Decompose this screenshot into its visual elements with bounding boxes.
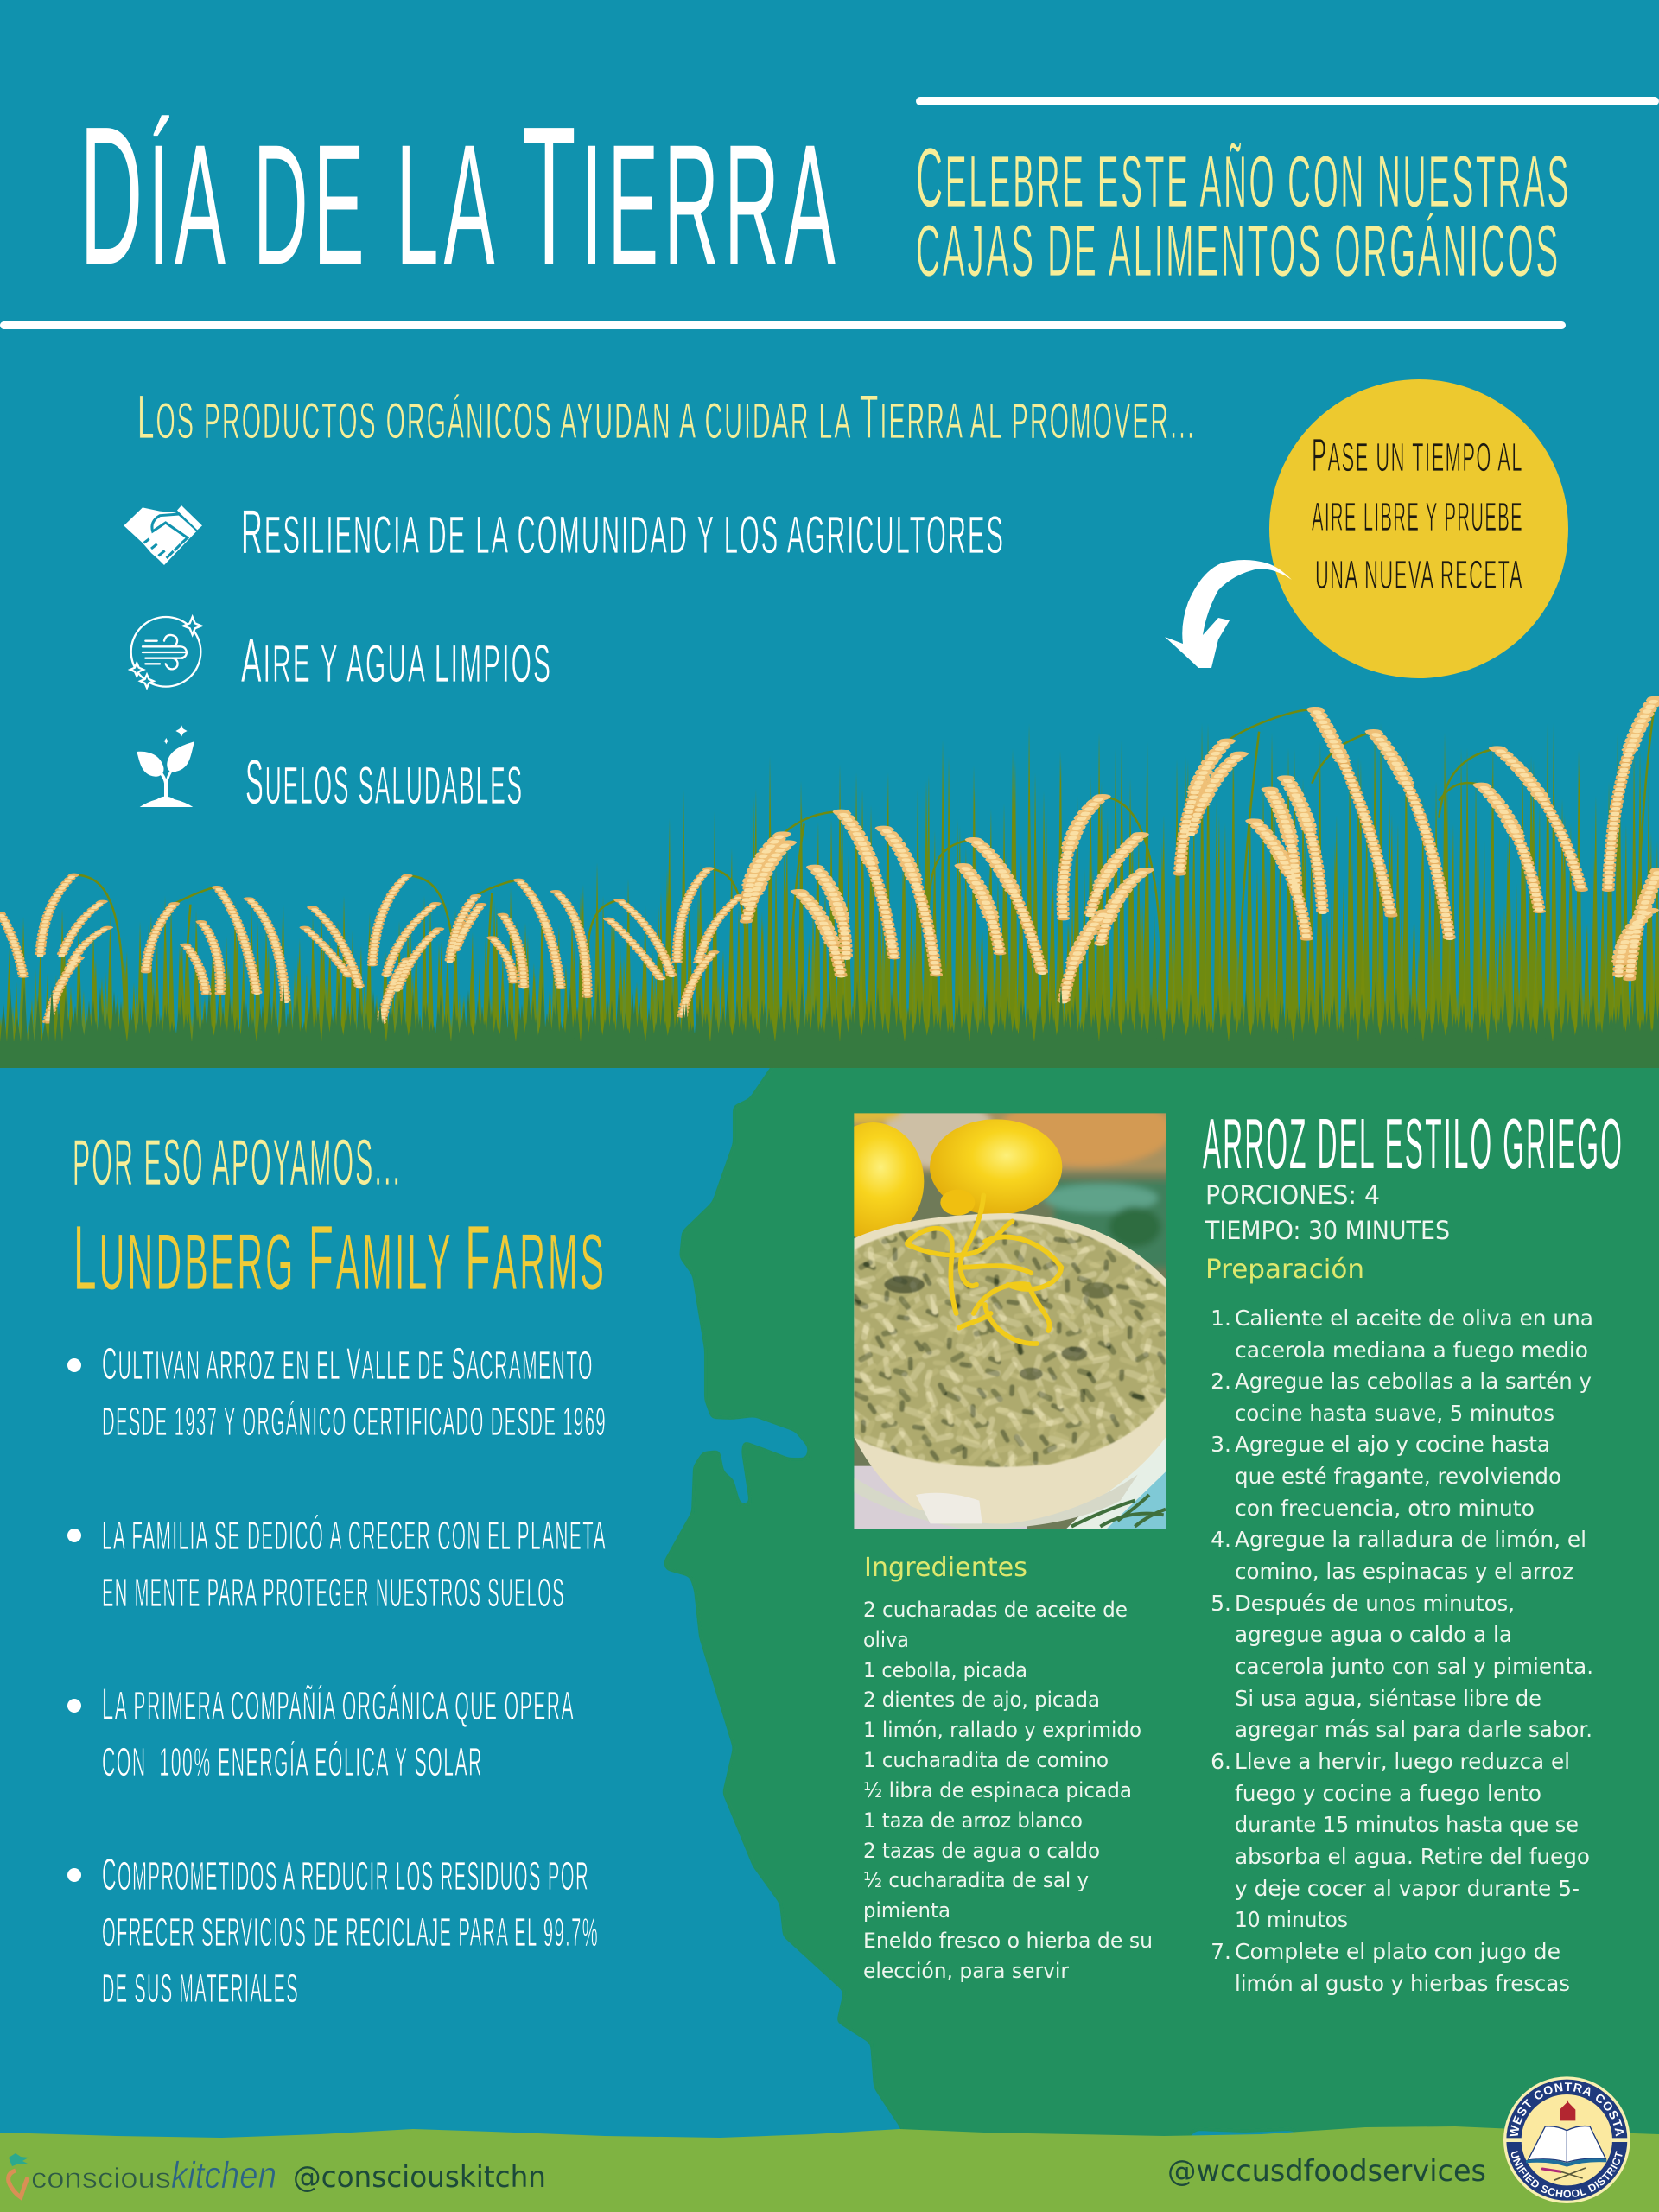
preparation steps: fuego y cocine a fuego lento [1235,1781,1541,1806]
subtitle [916,130,1571,291]
ingredients list: 2 dientes de ajo, picada [863,1688,1100,1712]
preparation steps: cacerola junto con sal y pimienta. [1235,1654,1593,1679]
ingredients heading: Ingredientes [864,1553,1027,1583]
ingredients list: ½ cucharadita de sal y [863,1868,1089,1892]
icon: carrot [9,2153,29,2197]
preparation steps: limón al gusto y hierbas frescas [1235,1971,1570,1996]
ingredients list: 2 cucharadas de aceite de [863,1598,1128,1622]
bullet 1 [67,1339,607,1444]
ingredients list: Eneldo fresco o hierba de su [863,1929,1153,1953]
preparation steps: comino, las espinacas y el arroz [1235,1559,1573,1584]
preparation steps: 3. [1211,1432,1231,1457]
olive front blades [9,895,1659,1068]
logo: conscious kitchen [9,2153,276,2197]
preparation steps [1211,1306,1593,1996]
benefit 2: AIRE Y AGUA LIMPIOS [241,626,552,696]
ingredients list: ½ libra de espinaca picada [863,1778,1132,1802]
preparation steps: 10 minutos [1235,1907,1348,1932]
preparation steps: Lleve a hervir, luego reduzca el [1235,1749,1570,1774]
infographic canvas: COMPROMETIDOS A REDUCIR LOS RESIDUOS POR [102,1850,589,1900]
large panicles: upper thick husk [746,698,1659,1002]
large panicles: husk [746,698,1659,1002]
arrow [1165,560,1292,668]
header rule bottom [0,321,1566,329]
infographic canvas: POR ESO APOYAMOS... [73,1126,402,1198]
preparation steps: Agregue las cebollas a la sartén y [1235,1369,1592,1394]
preparation steps: absorba el agua. Retire del fuego [1235,1844,1590,1869]
ingredients list: 1 limón, rallado y exprimido [863,1718,1141,1742]
large panicles: grain [746,698,1659,1002]
infographic canvas: EN MENTE PARA PROTEGER NUESTROS SUELOS [102,1570,565,1615]
handle: conscious kitchen: @consciouskitchn [293,2160,546,2195]
infographic canvas: LA FAMILIA SE DEDICÓ A CRECER CON EL PLANETA [102,1513,607,1558]
ingredients list: 2 tazas de agua o caldo [863,1839,1100,1863]
ingredients list: pimienta [863,1898,950,1923]
preparation steps: con frecuencia, otro minuto [1235,1496,1535,1521]
seal: west contra costa unified school district [1503,2076,1630,2203]
small panicles: grain [0,868,741,1022]
servings and time [1205,1180,1450,1245]
rice field illustration [0,698,1659,1068]
ingredients list: oliva [863,1628,909,1652]
photo: greek rice bowl [854,1113,1166,1529]
preparation steps: 7. [1211,1939,1231,1964]
ingredients list: elección, para servir [863,1959,1069,1983]
ingredients list: 1 cebolla, picada [863,1658,1027,1682]
preparation steps: 5. [1211,1591,1231,1616]
preparation steps: cocine hasta suave, 5 minutos [1235,1401,1554,1426]
preparation steps: Agregue el ajo y cocine hasta [1235,1432,1550,1457]
infographic canvas: LA PRIMERA COMPAÑÍA ORGÁNICA QUE OPERA [102,1680,575,1730]
bullet 1: CULTIVAN ARROZ EN EL VALLE DE SACRAMENTO [102,1339,594,1389]
handle: wccusd food services: @wccusdfoodservices [1167,2154,1486,2189]
preparation steps: 1. [1211,1306,1231,1331]
ingredients list: 1 cucharadita de comino [863,1748,1109,1772]
logo: conscious kitchen: conscious [31,2162,171,2194]
logo: conscious kitchen: kitchen [171,2154,276,2196]
servings and time: TIEMPO: 30 MINUTES [1205,1216,1450,1245]
panel: green recipe background [664,1063,1659,2143]
preparation steps: y deje cocer al vapor durante 5- [1235,1876,1580,1901]
bullet 2 [67,1513,607,1615]
seal: west contra costa unified school district: WEST CONTRA COSTA [1509,2082,1624,2136]
preparation steps: 6. [1211,1749,1231,1774]
ingredients list: 1 taza de arroz blanco [863,1808,1083,1833]
bullet list: farm facts [67,1339,607,2011]
infographic canvas: DESDE 1937 Y ORGÁNICO CERTIFICADO DESDE 1969 [102,1399,607,1444]
preparation steps: 4. [1211,1527,1231,1552]
intro heading: LOS PRODUCTOS ORGÁNICOS AYUDAN A CUIDAR LA TIERRA AL PROMOVER... [137,384,1196,452]
rice panicles [0,698,1659,1022]
title: DÍA DE LA TIERRA [79,86,841,306]
bullet 3 [67,1680,575,1784]
header rule top [916,97,1659,105]
stems [74,698,1656,1048]
icon: handshake [124,505,202,565]
icon: sprout [137,725,194,807]
infographic canvas: SUELOS SALUDABLES [245,748,524,817]
preparation steps: agregar más sal para darle sabor. [1235,1717,1592,1742]
preparation steps: que esté fragante, revolviendo [1235,1464,1561,1489]
infographic canvas: OFRECER SERVICIOS DE RECICLAJE PARA EL 99.7% [102,1910,599,1955]
seal: west contra costa unified school district: UNIFIED SCHOOL DISTRICT [1510,2151,1623,2198]
dark green ground grass [0,981,1659,1068]
preparation steps: Agregue la ralladura de limón, el [1235,1527,1586,1552]
preparation steps: Complete el plato con jugo de [1235,1939,1560,1964]
icon: clean air [130,617,201,688]
preparation steps: cacerola mediana a fuego medio [1235,1338,1588,1363]
farm name: LUNDBERG FAMILY FARMS [73,1207,607,1309]
ingredients [863,1553,1153,1983]
bullet 4 [67,1850,599,2011]
bullet 4: DE SUS MATERIALES [102,1966,299,2011]
preparation steps: Caliente el aceite de oliva en una [1235,1306,1593,1331]
preparation steps: Después de unos minutos, [1235,1591,1515,1616]
preparation steps: Si usa agua, siéntase libre de [1235,1686,1541,1711]
bullet 3: CON 100% ENERGÍA EÓLICA Y SOLAR [102,1739,483,1784]
preparation steps: durante 15 minutos hasta que se [1235,1812,1579,1837]
preparation heading: Preparación [1205,1255,1364,1285]
small panicles: husk [0,868,741,1022]
callout: yellow circle [1269,379,1568,678]
preparation steps: 2. [1211,1369,1231,1394]
preparation steps: agregue agua o caldo a la [1235,1622,1512,1647]
tall grass blades [0,723,1659,1068]
servings and time: PORCIONES: 4 [1205,1180,1380,1210]
footer band [0,2126,1659,2212]
ingredients list [863,1598,1153,1983]
